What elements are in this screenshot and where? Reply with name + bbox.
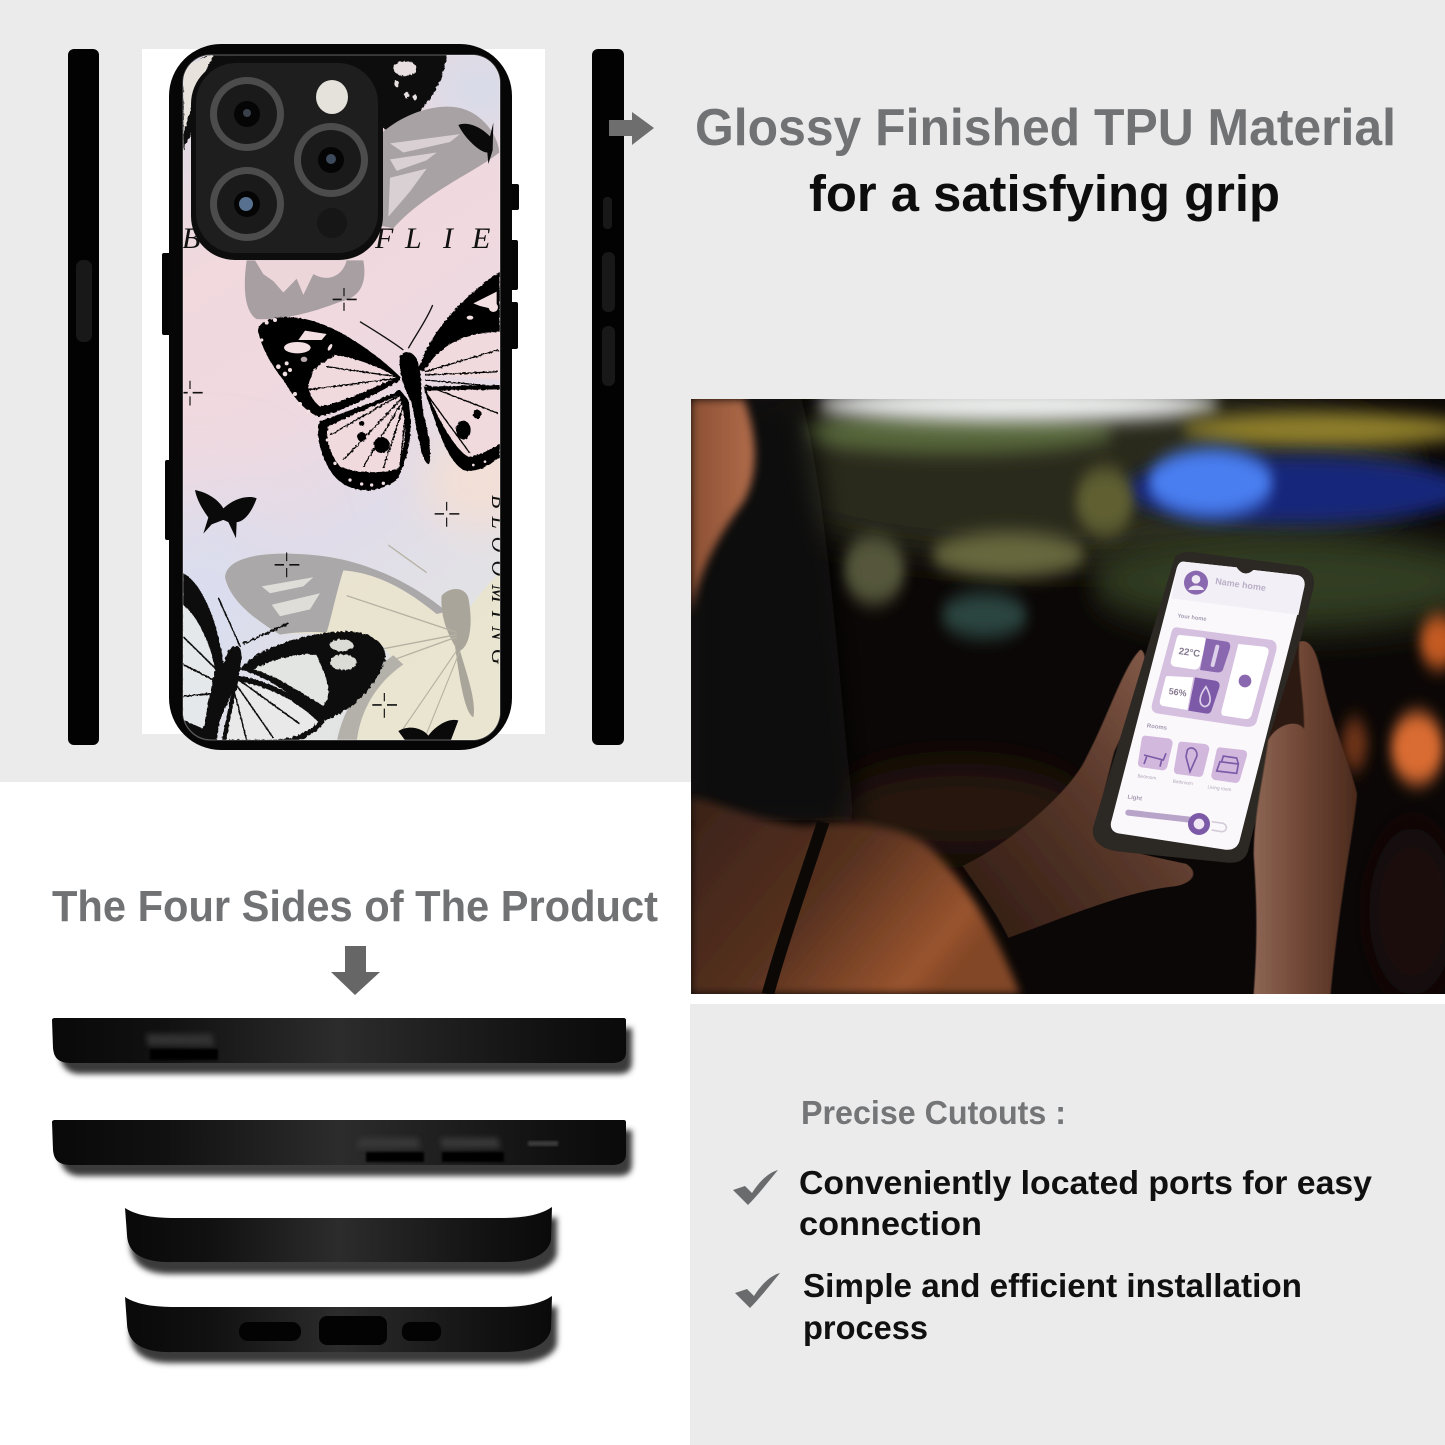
lettering on case: F <box>374 222 394 255</box>
app rooms label: Rooms <box>1146 723 1168 732</box>
small black butterfly top right <box>458 123 493 164</box>
icon: check mark 1 <box>733 1170 778 1205</box>
panel: bottom right grey background <box>690 1004 1445 1445</box>
white backing behind case <box>142 49 545 734</box>
text: installation point: Simple and efficient installation <box>803 1268 1302 1305</box>
camera sensor <box>317 208 347 238</box>
heading line two: for a satisfying grip <box>809 165 1280 222</box>
panel: precise cutouts <box>733 1094 1372 1347</box>
photo: woman holding phone <box>691 388 1445 995</box>
woman face <box>691 399 755 615</box>
right hand <box>1254 641 1357 994</box>
app climate card: 56% <box>1168 686 1187 698</box>
camera lens bottom <box>210 167 284 241</box>
app room tiles: Bathroom <box>1173 779 1193 786</box>
phone screen <box>1111 562 1305 850</box>
side strip 1 <box>52 1018 632 1074</box>
printed butterfly artwork <box>183 55 500 740</box>
case buttons <box>162 184 519 540</box>
app room tiles: Living room <box>1207 784 1232 792</box>
app climate card: 22°C <box>1178 646 1201 660</box>
heading: precise cutouts: Precise Cutouts : <box>801 1094 1066 1131</box>
case bumper <box>169 44 512 750</box>
app avatar <box>1184 571 1208 595</box>
glossy highlight on case edge <box>183 55 500 740</box>
lettering on case: BLOOMING <box>487 495 512 673</box>
bottom left black butterfly <box>183 573 385 743</box>
left hand <box>963 649 1193 938</box>
heading: glossy finished TPU material <box>695 99 1396 222</box>
blurred background landscape <box>729 388 1445 995</box>
heading: the four sides of the product: The Four Sides of The Product <box>52 882 658 931</box>
lettering on case: I <box>442 222 455 255</box>
side strip 3 <box>125 1207 557 1274</box>
app header band <box>1172 562 1305 615</box>
wing spots <box>260 292 498 487</box>
side strip 4 <box>125 1296 557 1363</box>
top black butterfly <box>183 54 447 150</box>
app light slider <box>1127 795 1226 835</box>
app light slider: Light <box>1127 795 1142 802</box>
side strip 2 <box>52 1120 632 1176</box>
small black butterfly bottom <box>398 720 458 743</box>
app climate card <box>1152 627 1277 727</box>
grey translucent butterfly bottom <box>225 545 500 743</box>
left side view of case <box>68 49 99 745</box>
main butterfly <box>258 272 500 490</box>
woman shoulder <box>691 797 1020 994</box>
sparkle stars <box>183 288 459 718</box>
icon: check mark 2 <box>735 1273 780 1308</box>
right side view of case <box>592 49 624 745</box>
small black butterfly left <box>195 490 257 538</box>
phone case front view <box>162 44 519 750</box>
panel: phone case product views <box>68 40 624 750</box>
lettering on case <box>182 222 512 673</box>
app room tiles: Bedroom <box>1137 773 1157 781</box>
app room tiles <box>1137 736 1247 792</box>
text: installation point: process <box>803 1310 928 1347</box>
woman hair <box>745 408 860 818</box>
text: ports point: Conveniently located ports for easy <box>799 1165 1372 1202</box>
dress strap <box>768 822 823 994</box>
text: installation point <box>803 1268 1302 1347</box>
lettering on case: B <box>182 222 200 255</box>
grey translucent butterfly top right <box>245 107 499 319</box>
camera module <box>191 60 383 260</box>
text: ports point: connection <box>799 1206 982 1243</box>
panel: top grey background <box>0 0 1445 782</box>
lettering on case: E <box>471 222 490 255</box>
camera flash <box>316 80 348 114</box>
panel: four sides of the product <box>52 882 658 1363</box>
app section label: Your home <box>1177 613 1207 623</box>
app title: Name home <box>1215 576 1267 593</box>
arrow: pointing down <box>331 946 380 995</box>
camera lens top <box>210 77 284 151</box>
lettering on case: L <box>404 222 422 255</box>
arrow: pointing right to heading <box>609 112 654 145</box>
phone device <box>1093 552 1314 863</box>
heading line one: Glossy Finished TPU Material <box>695 99 1396 157</box>
text: ports point <box>799 1165 1372 1243</box>
camera lens right <box>294 123 368 197</box>
